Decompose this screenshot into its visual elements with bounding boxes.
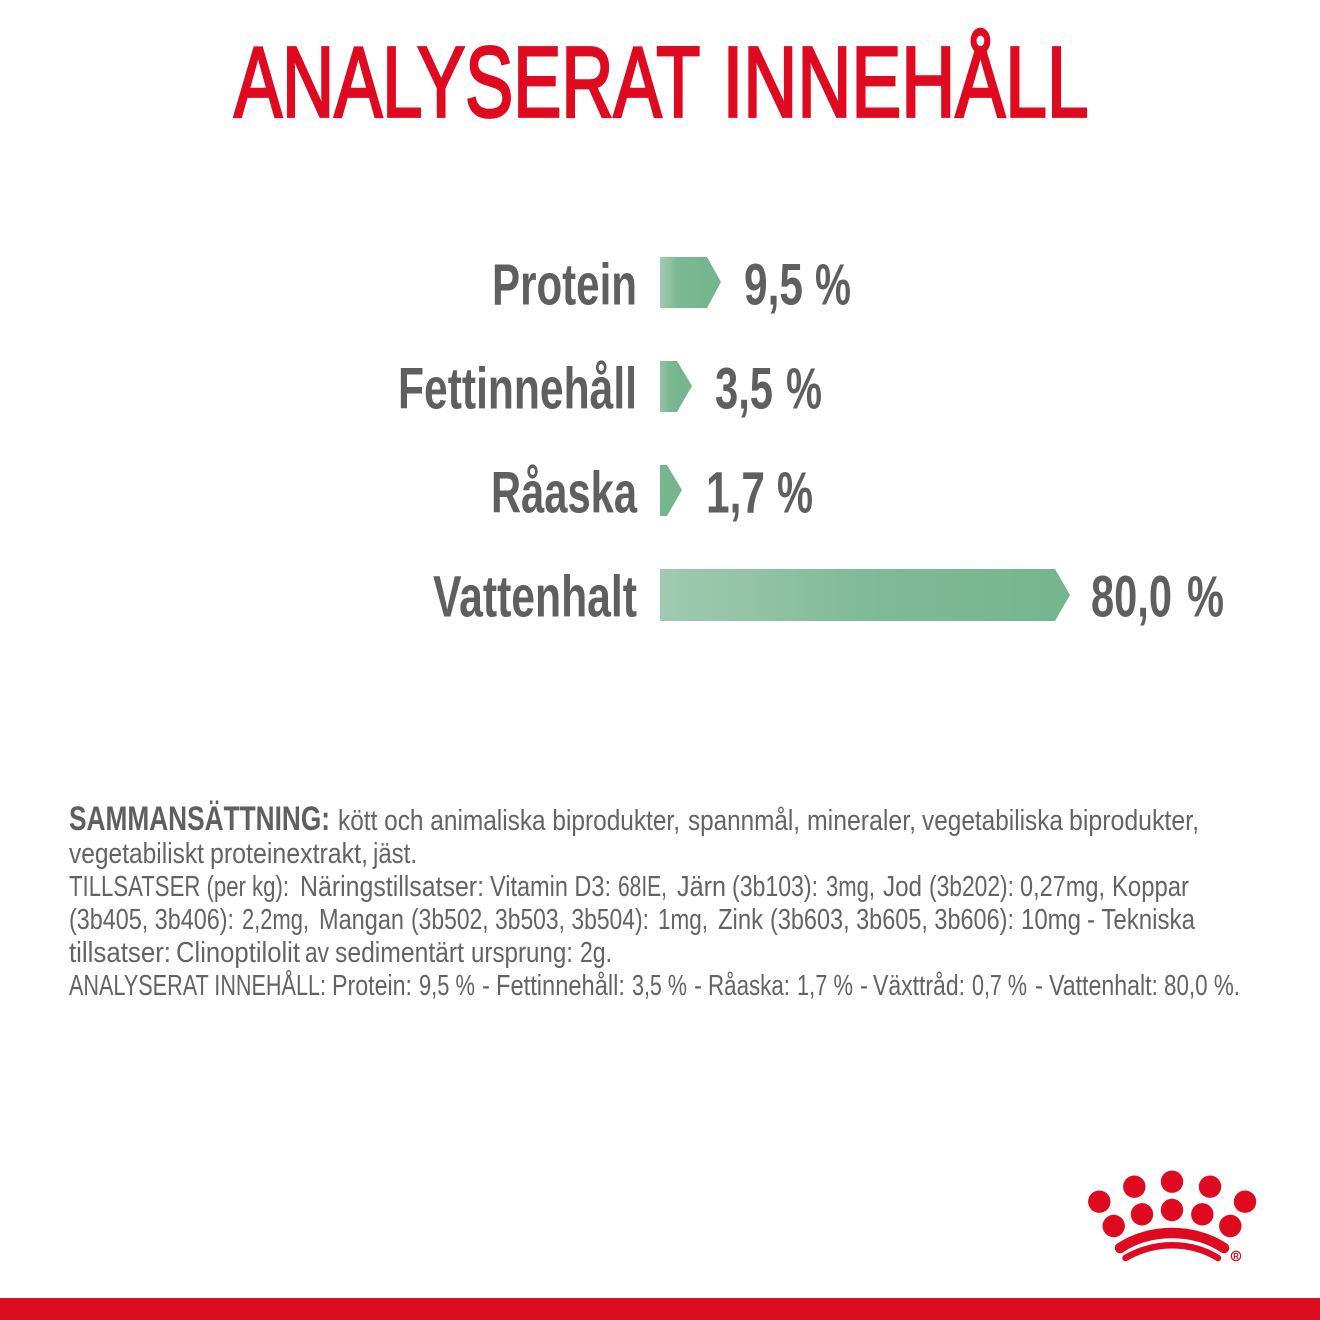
text block: composition: - [482, 970, 490, 1002]
text block: composition: sedimentärt [335, 937, 464, 969]
text block: composition: 2g. [580, 937, 612, 969]
icon: Royal Canin crown logo [1088, 1170, 1256, 1261]
text block: composition: Järn [677, 871, 726, 903]
text block: composition: Koppar [1112, 871, 1189, 903]
text block: composition: Mangan [319, 904, 404, 936]
text block: composition: spannmål, [688, 805, 800, 837]
row: Råaska: 1,7 [706, 460, 765, 526]
text block: composition: kött och animaliska biprodukter, [338, 805, 680, 837]
text block: composition: - [694, 970, 702, 1002]
title: ANALYSERAT [234, 26, 699, 138]
text block: composition: - [1035, 970, 1043, 1002]
row: Protein: % [815, 252, 851, 318]
text block: composition: Jod [883, 871, 922, 903]
text block: composition: ANALYSERAT INNEHÅLL: [69, 969, 326, 1002]
row: Råaska [491, 460, 813, 526]
text block: composition: 3mg, [826, 871, 875, 903]
text block: composition: 1mg, [658, 904, 708, 936]
row: Protein: 9,5 [744, 252, 803, 318]
text block: composition: vegetabiliska [922, 805, 1064, 837]
text block: composition: 0,7 % [972, 970, 1027, 1002]
text block: composition [69, 800, 1240, 1002]
text block: composition: (3b405, 3b406): [69, 904, 234, 936]
text block: composition: biprodukter, [1069, 805, 1199, 837]
text block: composition: Näringstillsatser: [300, 871, 484, 903]
text block: composition: Protein: [332, 970, 412, 1002]
row: Protein: Protein [492, 252, 637, 318]
text block: composition: (3b502, 3b503, 3b504): [411, 904, 649, 936]
icon: Royal Canin crown logo: R [1233, 1252, 1239, 1261]
text block: composition: Vattenhalt: [1049, 970, 1158, 1002]
text block: composition: 10mg [1021, 904, 1081, 936]
text block: composition: - [860, 970, 868, 1002]
text block: composition: vegetabiliskt [69, 838, 204, 870]
text block: composition: mineraler, [807, 805, 916, 837]
row: Vattenhalt [433, 564, 1224, 630]
text block: composition: proteinextrakt, [210, 838, 368, 870]
text block: composition: (3b603, 3b605, 3b606): [770, 904, 1014, 936]
row: Fettinnehåll: 3,5 [715, 356, 773, 422]
text block: composition: 3,5 % [632, 970, 687, 1002]
text block: composition: 0,27mg, [1020, 871, 1105, 903]
text block: composition: SAMMANSÄTTNING: [69, 800, 330, 838]
text block: composition: 9,5 % [419, 970, 475, 1002]
text block: composition: Zink [718, 904, 763, 936]
row: Fettinnehåll: Fettinnehåll [398, 356, 637, 422]
text block: composition: (3b202): [929, 871, 1014, 903]
text block: composition: tillsatser: [69, 937, 171, 969]
text block: composition: Clinoptilolit [176, 937, 300, 969]
row: Råaska: % [777, 460, 813, 526]
text block: composition: 2,2mg, [242, 904, 309, 936]
text block: composition: jäst. [372, 838, 417, 870]
row: Vattenhalt: Vattenhalt [433, 564, 637, 630]
text block: composition: ursprung: [471, 937, 573, 969]
text block: composition: Råaska: [708, 970, 790, 1002]
text block: composition: 1,7 % [797, 970, 853, 1002]
row: Vattenhalt: % [1187, 564, 1224, 630]
text block: composition: Fettinnehåll: [496, 970, 625, 1002]
text block: composition: av [305, 937, 329, 969]
text block: composition: Växttråd: [873, 970, 965, 1002]
bar chart [398, 252, 1224, 630]
text block: composition: 68IE, [618, 871, 667, 903]
title: INNEHÅLL [722, 26, 1088, 138]
row: Vattenhalt: 80,0 [1091, 564, 1172, 630]
row: Protein [492, 252, 851, 318]
row: Fettinnehåll: % [786, 356, 822, 422]
text block: composition: 80,0 %. [1164, 970, 1240, 1002]
text block: composition: - Tekniska [1087, 904, 1196, 936]
text block: composition: (3b103): [732, 871, 818, 903]
text block: composition: TILLSATSER (per kg): [69, 871, 289, 903]
text block: composition: Vitamin D3: [490, 871, 611, 903]
row: Råaska: Råaska [491, 460, 638, 526]
footer bar [0, 1298, 1320, 1320]
